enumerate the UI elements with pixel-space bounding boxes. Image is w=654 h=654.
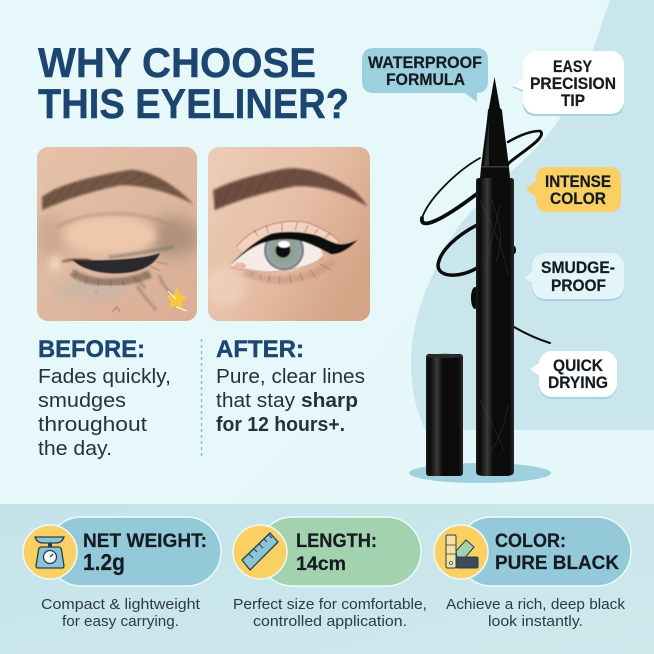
spec: color: look instantly. [488,613,583,630]
callout: smudge-proof [524,253,624,301]
pen shadow [409,463,551,483]
icon: ruler [233,525,287,579]
after section: for 12 hours+. [216,414,345,436]
before section: throughout [38,414,147,436]
title: WHY CHOOSE [38,39,316,86]
after section: that stay sharp [216,390,358,412]
after section: AFTER: [216,336,304,363]
after section [216,336,365,436]
spec: length [233,517,427,630]
callout: waterproof formula: WATERPROOF [368,54,482,72]
spec: net weight: for easy carrying. [62,613,179,630]
eyeliner pen [476,77,514,476]
bottom specs band [0,504,654,654]
callout: intense color: INTENSE [545,173,611,191]
title: THIS EYELINER? [38,80,349,127]
after section: Pure, clear lines [216,366,365,388]
callout: intense color: COLOR [550,190,606,208]
callout: waterproof formula [362,48,488,102]
callout: easy precision tip: EASY [553,58,592,76]
spec: net weight: NET WEIGHT: [83,530,207,552]
before section: BEFORE: [38,336,145,363]
callout: intense color [526,167,621,212]
icon: yellow star [166,286,187,311]
callout: smudge-proof: SMUDGE- [541,259,615,277]
icon: kitchen scale [23,525,77,579]
spec: length: LENGTH: [296,530,377,552]
callout: easy precision tip: TIP [561,92,585,110]
spec: color: COLOR: [495,530,566,552]
icon: colour swatch fan [434,525,488,579]
lower eye shadow [245,260,335,280]
photo: after, clean winged liner [205,144,373,324]
before section: Fades quickly, [38,366,171,388]
eyeliner cap [426,354,463,476]
before section: smudges [38,390,126,412]
spec: color [434,517,631,630]
eyeliner swatch stroke [422,131,550,343]
background blue shape [411,0,654,430]
spec: length: Perfect size for comfortable, [233,596,427,613]
callout: easy precision tip [512,51,624,116]
callout: quick drying: DRYING [548,374,608,392]
spec: color: PURE BLACK [495,552,619,574]
callout: smudge-proof: PROOF [551,277,606,295]
spec: net weight: 1.2g [83,549,125,575]
callout: easy precision tip: PRECISION [530,75,616,93]
spec: length: controlled application. [253,613,407,630]
before section: the day. [38,438,112,460]
callout: waterproof formula: FORMULA [386,71,465,89]
spec: color: Achieve a rich, deep black [446,596,626,613]
callout: quick drying [530,351,617,399]
spec: length: 14cm [296,553,346,575]
before section [38,336,171,460]
title [38,39,349,127]
photo: before, smudged eye [34,144,200,324]
spec: net weight [23,517,221,630]
spec: net weight: Compact & lightweight [41,596,201,613]
eyelid [236,221,340,254]
callout: quick drying: QUICK [553,357,603,375]
